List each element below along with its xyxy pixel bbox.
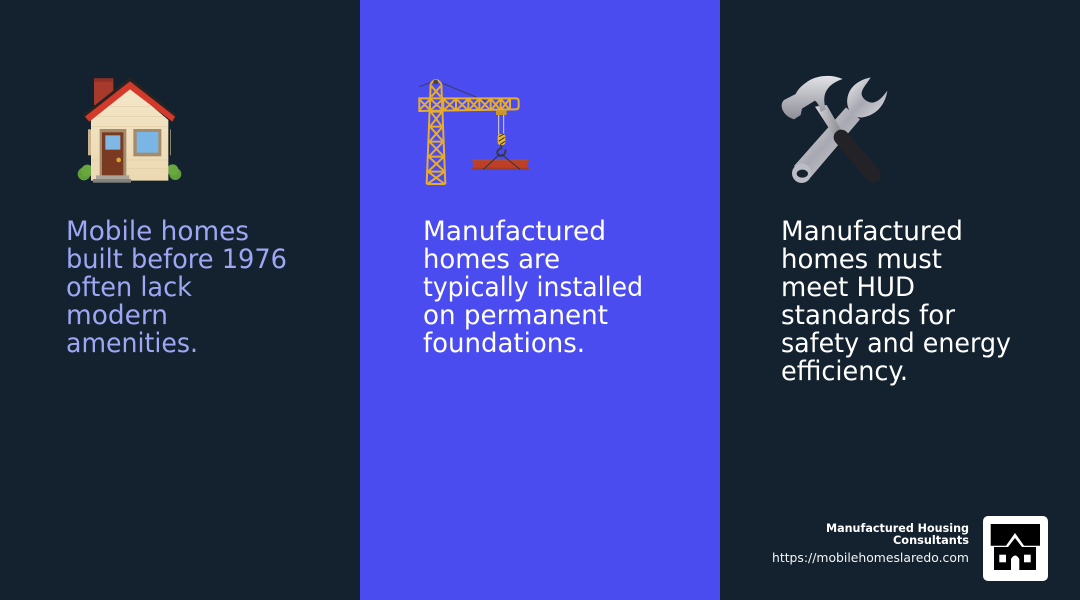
text: mobile homes: modern — [66, 300, 168, 331]
text: mobile homes: built before 1976 — [66, 244, 287, 275]
text: manufactured homes foundations: homes are — [423, 244, 560, 275]
text: manufactured homes foundations: typically installed — [423, 272, 643, 303]
text: mobile homes: Mobile homes — [66, 216, 249, 247]
text: manufactured homes foundations: on permanent — [423, 300, 608, 331]
text: manufactured homes foundations: Manufactured — [423, 216, 606, 247]
logo — [983, 516, 1048, 581]
text: HUD standards: meet HUD — [781, 272, 915, 303]
panel: mobile homes — [0, 0, 360, 600]
icon: construction crane — [419, 80, 529, 184]
text: mobile homes — [66, 216, 287, 359]
icon: house — [78, 77, 181, 183]
text: mobile homes: amenities. — [66, 328, 198, 359]
text: manufactured homes foundations: foundations. — [423, 328, 585, 359]
text: HUD standards: homes must — [781, 244, 942, 275]
text: mobile homes: often lack — [66, 272, 192, 303]
text: HUD standards: efficiency. — [781, 356, 908, 387]
text: manufactured homes foundations — [423, 216, 643, 359]
brand name: Manufactured Housing — [826, 521, 969, 535]
brand name — [826, 521, 969, 547]
icon: hammer and wrench — [782, 76, 887, 183]
website url: https://mobilehomeslaredo.com — [772, 550, 969, 565]
text: HUD standards: Manufactured — [781, 216, 963, 247]
panel: HUD standards — [720, 0, 1080, 600]
text: HUD standards: safety and energy — [781, 328, 1011, 359]
brand name: Consultants — [893, 533, 969, 547]
panel: manufactured homes foundations — [360, 0, 720, 600]
text: HUD standards: standards for — [781, 300, 956, 331]
text: HUD standards — [781, 216, 1011, 387]
